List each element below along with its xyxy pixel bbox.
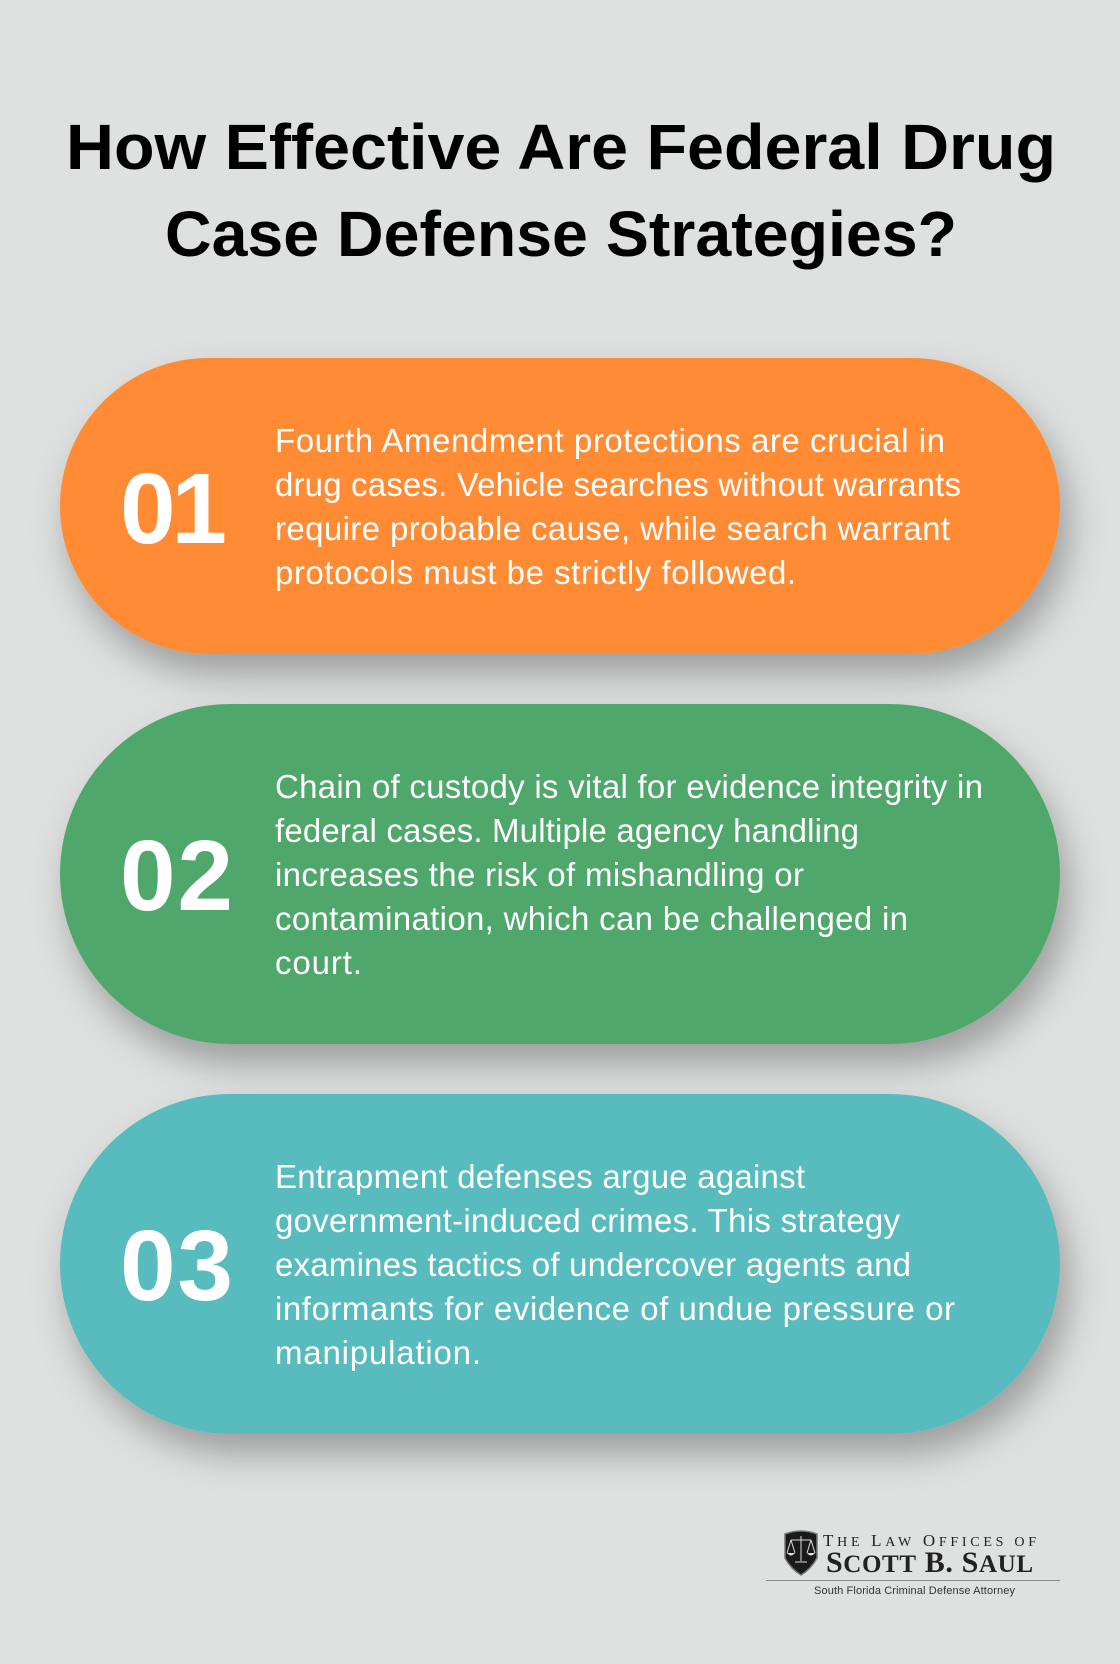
panel: step 02 [60, 704, 1060, 1044]
text block: step 03: manipulation. [275, 1334, 481, 1371]
text block: step 02: court. [275, 944, 362, 981]
panel: step 01 [60, 358, 1060, 654]
text block: step 01: Fourth Amendment protections are crucial in [275, 422, 945, 459]
number 02: 02 [120, 820, 233, 932]
logo tagline: South Florida Criminal Defense Attorney [814, 1585, 1016, 1597]
text block: step 02: Chain of custody is vital for evidence integrity in [275, 768, 983, 805]
text block: step 03: Entrapment defenses argue against [275, 1158, 805, 1195]
text block: step 03: informants for evidence of undue pressure or [275, 1290, 955, 1327]
text block: step 01: drug cases. Vehicle searches without warrants [275, 466, 961, 503]
text block: step 02: contamination, which can be challenged in [275, 900, 908, 937]
text block: step 03: examines tactics of undercover agents and [275, 1246, 911, 1283]
text block: step 03: government-induced crimes. This strategy [275, 1202, 900, 1239]
logo firm name: T HE L AW O FFICES OF [823, 1531, 1036, 1550]
title: Case Defense Strategies? [165, 198, 957, 270]
text block: step 02: federal cases. Multiple agency handling [275, 812, 859, 849]
number 01: 01 [120, 453, 227, 565]
text block: step 02 [275, 768, 983, 981]
text block: step 02: increases the risk of mishandling or [275, 856, 804, 893]
text block: step 03 [275, 1158, 955, 1371]
panel: step 03 [60, 1094, 1060, 1434]
text block: step 01 [275, 422, 961, 591]
title: How Effective Are Federal Drug [66, 111, 1056, 183]
text block: step 01: protocols must be strictly followed. [275, 554, 796, 591]
text block: step 01: require probable cause, while search warrant [275, 510, 950, 547]
icon: shield with scales [785, 1531, 817, 1575]
logo [766, 1531, 1060, 1597]
title [66, 111, 1056, 270]
number 03: 03 [120, 1210, 233, 1322]
logo attorney name: SCOTT B. SAUL [826, 1546, 1033, 1579]
